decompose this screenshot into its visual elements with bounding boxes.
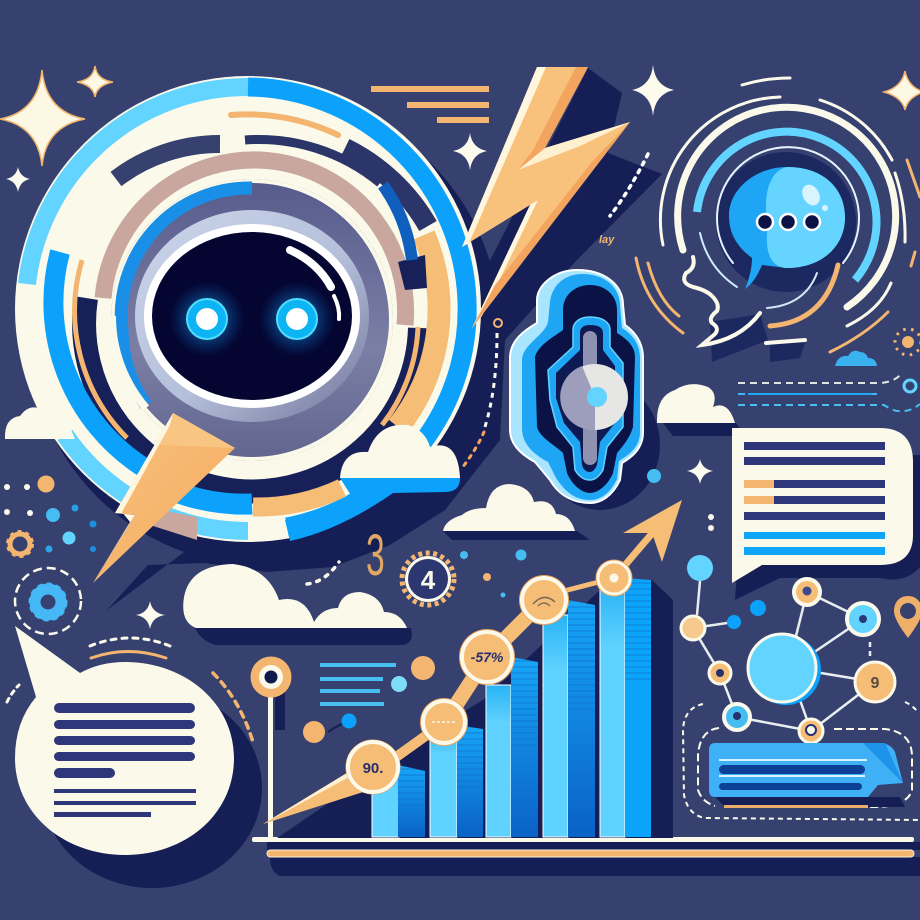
tag underline <box>724 805 868 808</box>
chart node -57%: -57% <box>471 649 504 665</box>
location pin <box>894 596 920 638</box>
right eye <box>259 281 335 357</box>
chart node 4 <box>519 575 569 625</box>
thin white ring <box>717 147 859 263</box>
white stars <box>6 65 713 629</box>
face screen <box>148 228 356 404</box>
bar 5 <box>600 578 651 837</box>
orange arc right <box>398 235 439 427</box>
hub node <box>748 634 821 705</box>
panel body <box>732 428 913 583</box>
arc top navy thin <box>245 139 380 183</box>
second ring blue left arc <box>53 252 143 467</box>
node e <box>794 579 820 605</box>
robot head ball <box>111 179 393 461</box>
arc top orange <box>231 114 338 135</box>
dashed connector lines <box>738 373 920 411</box>
left eye <box>169 281 245 357</box>
dark ring band <box>84 298 420 491</box>
face surround <box>135 210 369 422</box>
node nine: 9 <box>871 675 880 692</box>
bottom thin arcs <box>767 273 817 308</box>
shadows under speech icon <box>710 152 856 362</box>
panel lines <box>744 442 885 555</box>
network links <box>693 581 875 731</box>
second ring orange bottom arc <box>253 488 342 507</box>
node d <box>799 719 823 743</box>
scribble text: lay <box>599 234 615 246</box>
dashed frame right <box>905 702 918 712</box>
arcs top navy thick <box>116 144 220 179</box>
chart node 90: 90. <box>363 760 383 777</box>
main robot ring <box>15 76 481 542</box>
cream crescent <box>112 316 146 408</box>
tan ring <box>103 160 406 325</box>
bar 4 <box>543 600 595 837</box>
panel shadow <box>735 455 920 600</box>
tag fold <box>863 743 903 783</box>
lock / shield icon <box>510 270 660 510</box>
bar 1 <box>372 765 425 837</box>
typing dots <box>757 214 820 230</box>
dark block right <box>398 255 427 290</box>
chart node 2 <box>420 698 468 746</box>
cloud on ring <box>285 425 460 541</box>
bar 3 <box>486 657 538 837</box>
head silhouette <box>684 257 760 345</box>
dots near chart <box>460 469 714 598</box>
ring base disc <box>15 76 481 542</box>
lock shadow <box>540 380 660 510</box>
chart shadow <box>277 580 673 838</box>
dashed frame outer <box>683 704 920 820</box>
pin marker and pole <box>250 656 292 837</box>
sun icon <box>895 329 920 355</box>
left dots cluster <box>4 476 96 552</box>
node f <box>847 603 879 635</box>
orange thick arc <box>770 265 838 326</box>
lock dark cutout <box>535 285 635 493</box>
number three: 3 <box>366 524 385 588</box>
tag shadow <box>715 797 905 807</box>
right speech panel <box>732 428 920 600</box>
big lightning bolt <box>462 67 630 328</box>
outer ring: light blue arc <box>27 87 248 284</box>
tan segment at bottom <box>150 510 197 540</box>
trend arrow <box>263 500 682 824</box>
node a <box>681 616 705 640</box>
orange arcs left <box>636 258 683 333</box>
tag body <box>709 743 903 797</box>
lock dial <box>562 364 628 430</box>
chart node 5 <box>596 560 632 596</box>
dashed frame inner <box>698 728 912 807</box>
lock outer <box>510 270 643 503</box>
blue gear icon <box>15 568 81 634</box>
lines top centre <box>371 86 489 123</box>
network blue dots <box>727 600 766 629</box>
legend lines with dots <box>303 656 435 743</box>
lock pin <box>583 331 597 465</box>
sparkle stars <box>0 66 920 166</box>
lock blue body <box>522 274 640 500</box>
arc top navy right <box>345 148 428 226</box>
node nine <box>855 662 895 702</box>
second ring blue bottom arc <box>150 480 252 504</box>
cloud top right <box>657 384 745 436</box>
lock dial centre <box>587 387 607 407</box>
thin orange arc right <box>382 327 418 425</box>
small blue cloud <box>835 351 877 366</box>
outer ring: blue arc <box>248 87 467 527</box>
dotted line to lock <box>462 319 502 468</box>
network top node <box>687 555 713 581</box>
lightning bolt on ring <box>93 413 235 583</box>
light blue arc <box>697 132 876 280</box>
node b <box>709 662 731 684</box>
chart node -57% <box>459 629 515 685</box>
gear badge four <box>402 553 454 605</box>
thin orange arc left <box>75 260 127 438</box>
lock inner ring <box>548 317 623 480</box>
outer thin arcs <box>660 97 780 245</box>
chart node 90 <box>346 740 400 794</box>
shadows behind main illustration <box>28 68 673 838</box>
speech bubble <box>729 167 845 289</box>
speech icon with rings <box>636 78 920 352</box>
bubble shadow <box>42 688 262 888</box>
bar chart <box>277 578 673 838</box>
screen highlight small <box>334 296 339 319</box>
bubble text lines <box>54 703 196 817</box>
small gear icon <box>8 532 32 556</box>
arcs above left bubble <box>7 638 253 742</box>
bubble body <box>15 626 234 855</box>
outer ring: lower light blue arc <box>65 435 248 531</box>
tag bar with dashed frames <box>683 702 920 820</box>
tag lines <box>719 759 867 790</box>
baseline <box>252 837 920 876</box>
cloud centre <box>443 484 590 540</box>
cloud left of ring <box>5 404 75 439</box>
cream ring arc <box>678 107 896 307</box>
screen highlight <box>290 250 331 287</box>
cream inner ring <box>113 181 391 459</box>
dotted arc near three <box>307 562 339 584</box>
node c <box>724 704 750 730</box>
bar 2 <box>430 725 483 837</box>
cloud large <box>183 564 412 645</box>
network diagram <box>681 555 895 743</box>
left blue crescent <box>121 188 252 405</box>
left speech bubble <box>15 626 262 888</box>
dotted path <box>610 154 648 216</box>
lock inner dark <box>556 325 615 472</box>
gear badge four: 4 <box>421 565 436 595</box>
